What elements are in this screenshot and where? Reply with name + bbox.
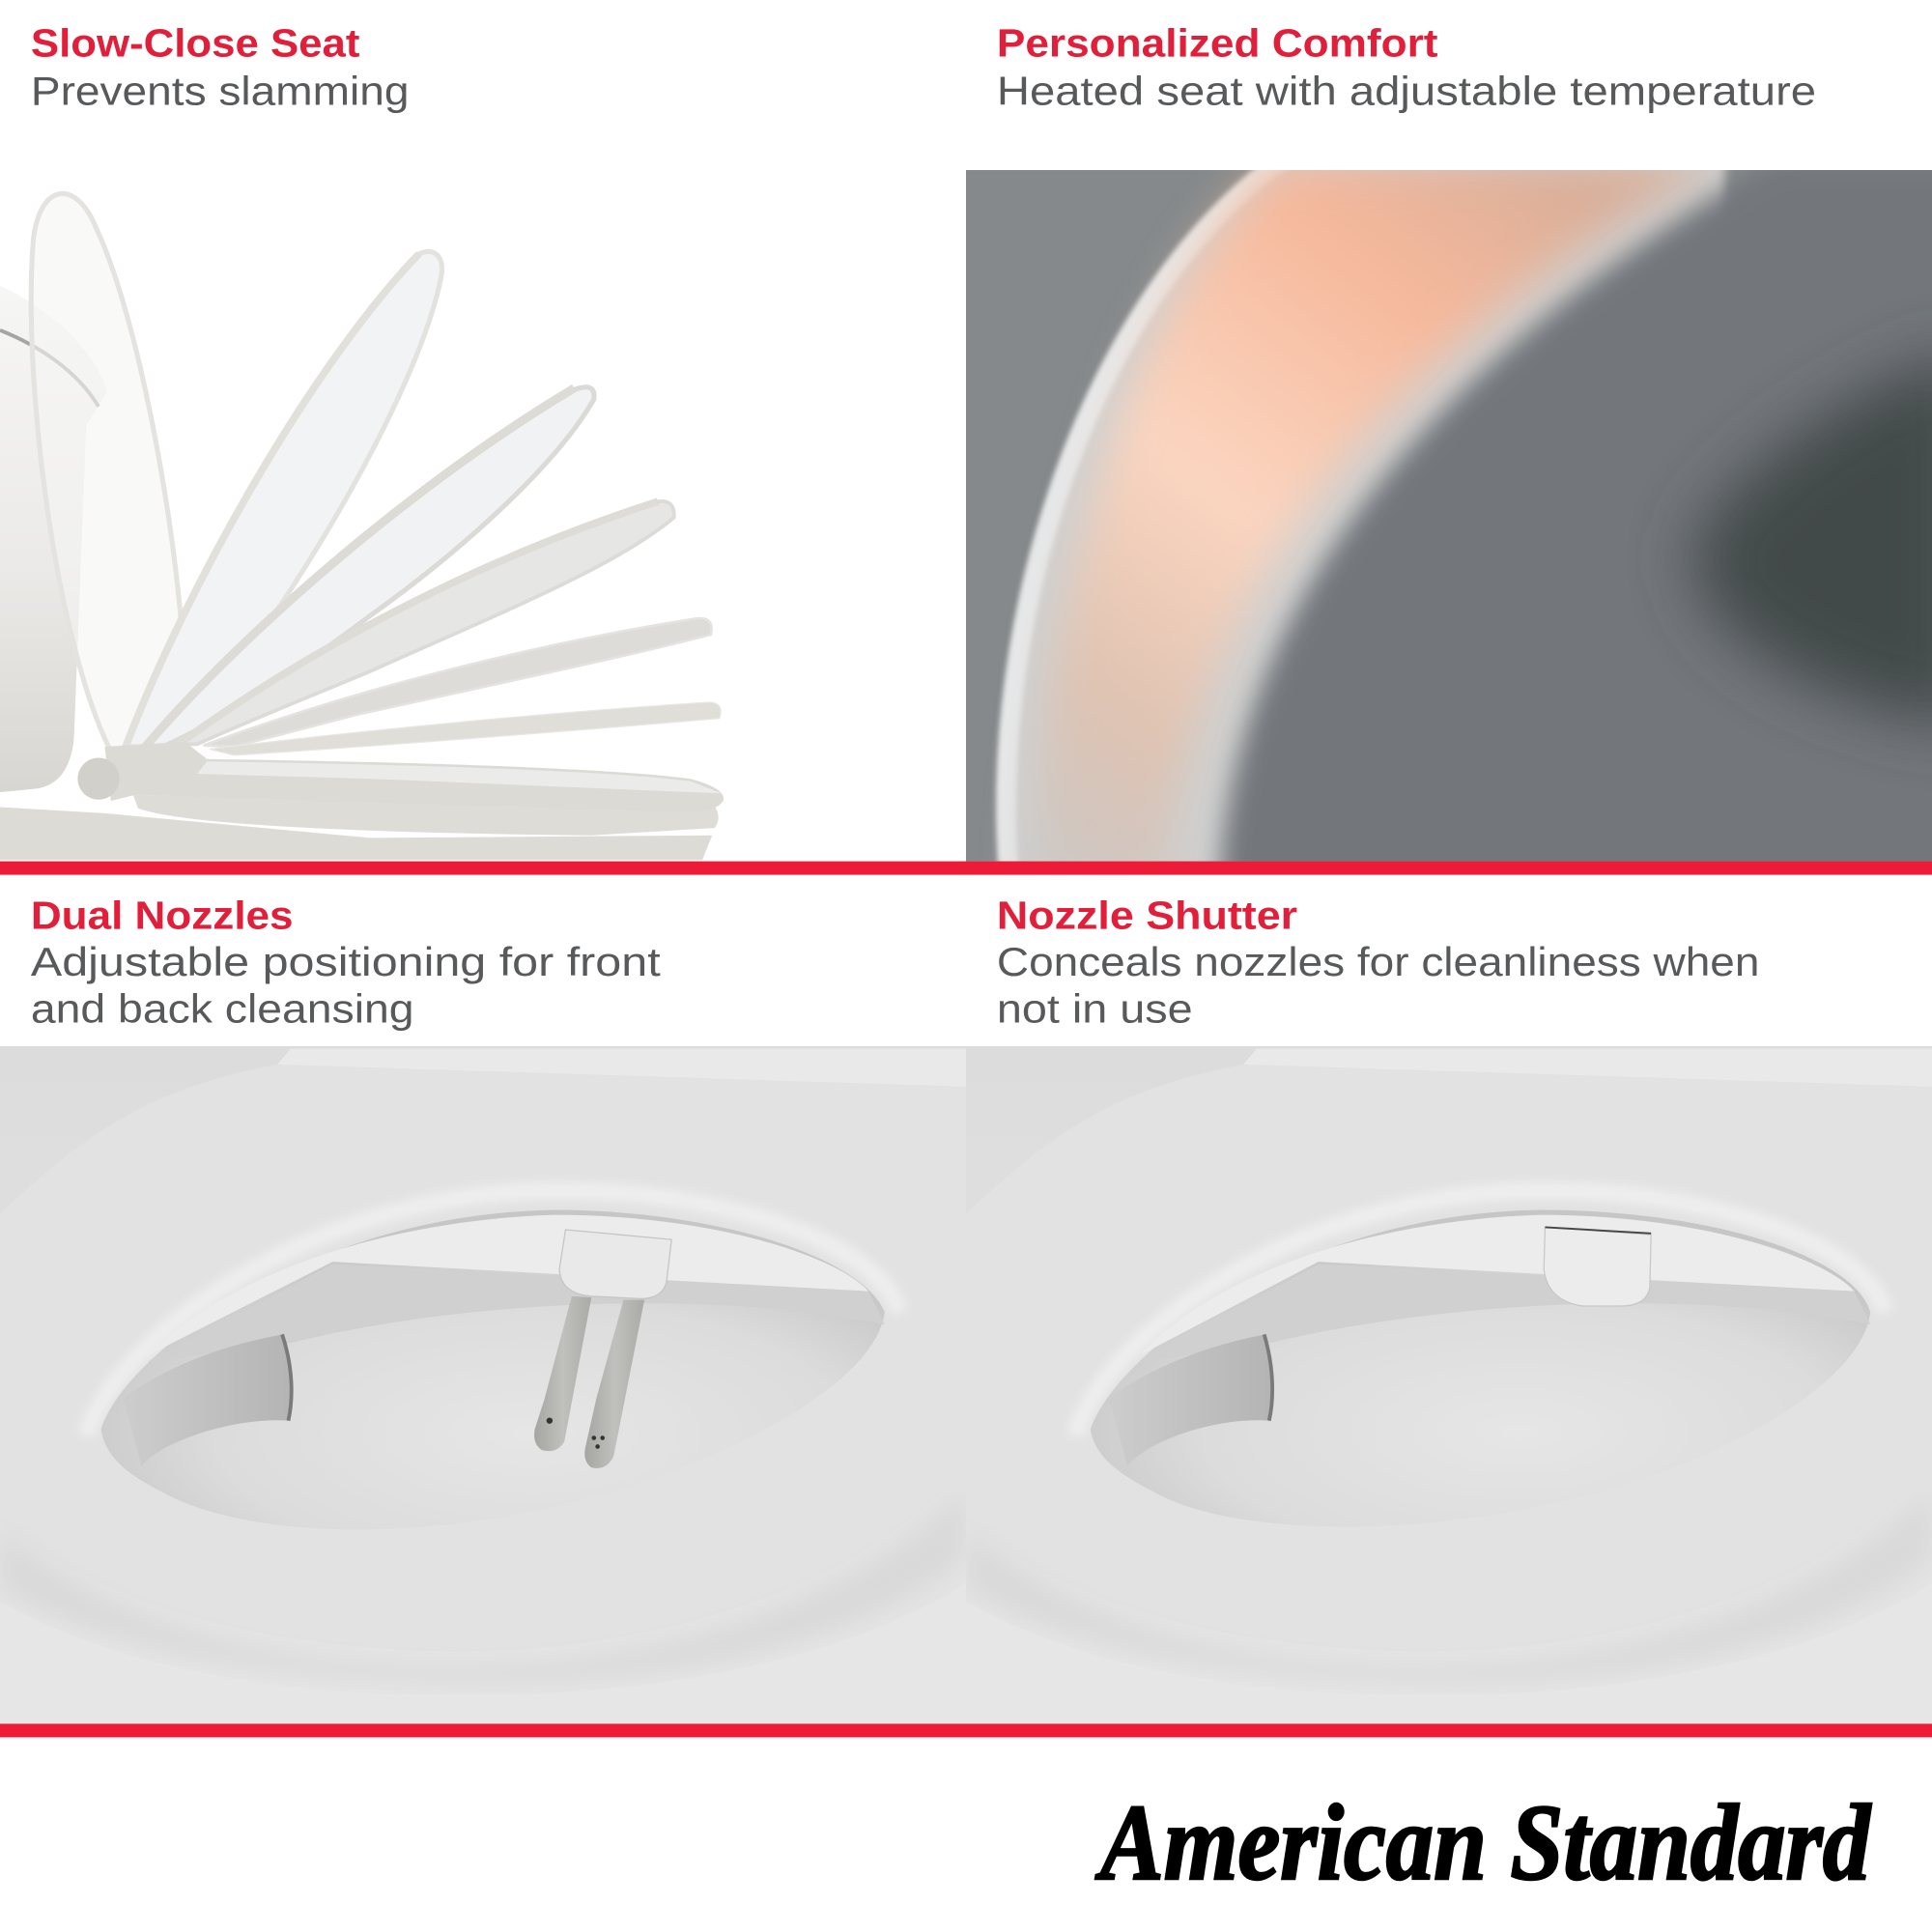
lid position: 6 [210,702,721,755]
photo: seat closing sequence [0,194,724,860]
heading: nozzle shutter: Nozzle Shutter [997,894,1297,938]
photo: heated seat glow [966,160,1932,899]
nozzle: rear wash [534,1296,591,1451]
nozzle: front wash [584,1300,644,1468]
heading: dual nozzles: Dual Nozzles [31,894,294,938]
photo: bowl with extended nozzles [0,1046,966,1723]
panel: slow-close seat [0,21,724,860]
nozzle cover [559,1230,671,1298]
seat rim [1076,1190,1886,1435]
inner ledge [149,1291,885,1362]
heading: personalized comfort: Personalized Comfort [997,21,1438,66]
divider bar [0,862,1932,875]
bowl opening [101,1210,885,1529]
background wall [966,170,1932,862]
lower seat [133,795,719,836]
seat underside [148,1215,868,1355]
bowl opening [1091,1210,1870,1526]
text: nozzle shutter description: not in use [997,986,1193,1032]
siphon shadow [142,1335,290,1461]
panel: personalized comfort [966,21,1932,899]
seat underside [1140,1215,1855,1355]
panel: dual nozzles [0,894,966,1723]
siphon shadow [1109,1334,1272,1466]
toilet base [0,807,712,860]
toilet tank [0,286,82,792]
nozzle shutter cover [1544,1227,1651,1306]
divider bar [0,1723,1932,1737]
text: prevents slamming: Prevents slamming [31,68,409,113]
lid position: 4 [179,501,674,744]
seat white edge [1007,160,1282,887]
hinge [77,757,120,800]
bowl interior [1220,160,1932,899]
lid position: 2 [126,251,442,747]
text: dual nozzles description: Adjustable positioning for front [31,939,661,984]
inner ledge [1140,1264,1870,1361]
photo: bowl with shutter closed [966,1046,1932,1723]
lid position: 5 [203,618,712,747]
lid position: fully open [31,194,185,752]
lid position: 3 [146,387,594,747]
drain shadow [1693,352,1932,727]
panel: nozzle shutter [966,894,1932,1723]
seat rim [86,1190,899,1435]
text: heated seat description: Heated seat with adjustable temperature [997,68,1816,113]
seat pale surface [1001,160,1725,887]
heading: slow-close seat: Slow-Close Seat [31,21,360,66]
text: dual nozzles description: and back cleansing [31,986,414,1032]
heated band [1029,160,1725,887]
closed lid [104,742,724,812]
text: nozzle shutter description: Conceals nozzles for cleanliness when [997,939,1759,984]
